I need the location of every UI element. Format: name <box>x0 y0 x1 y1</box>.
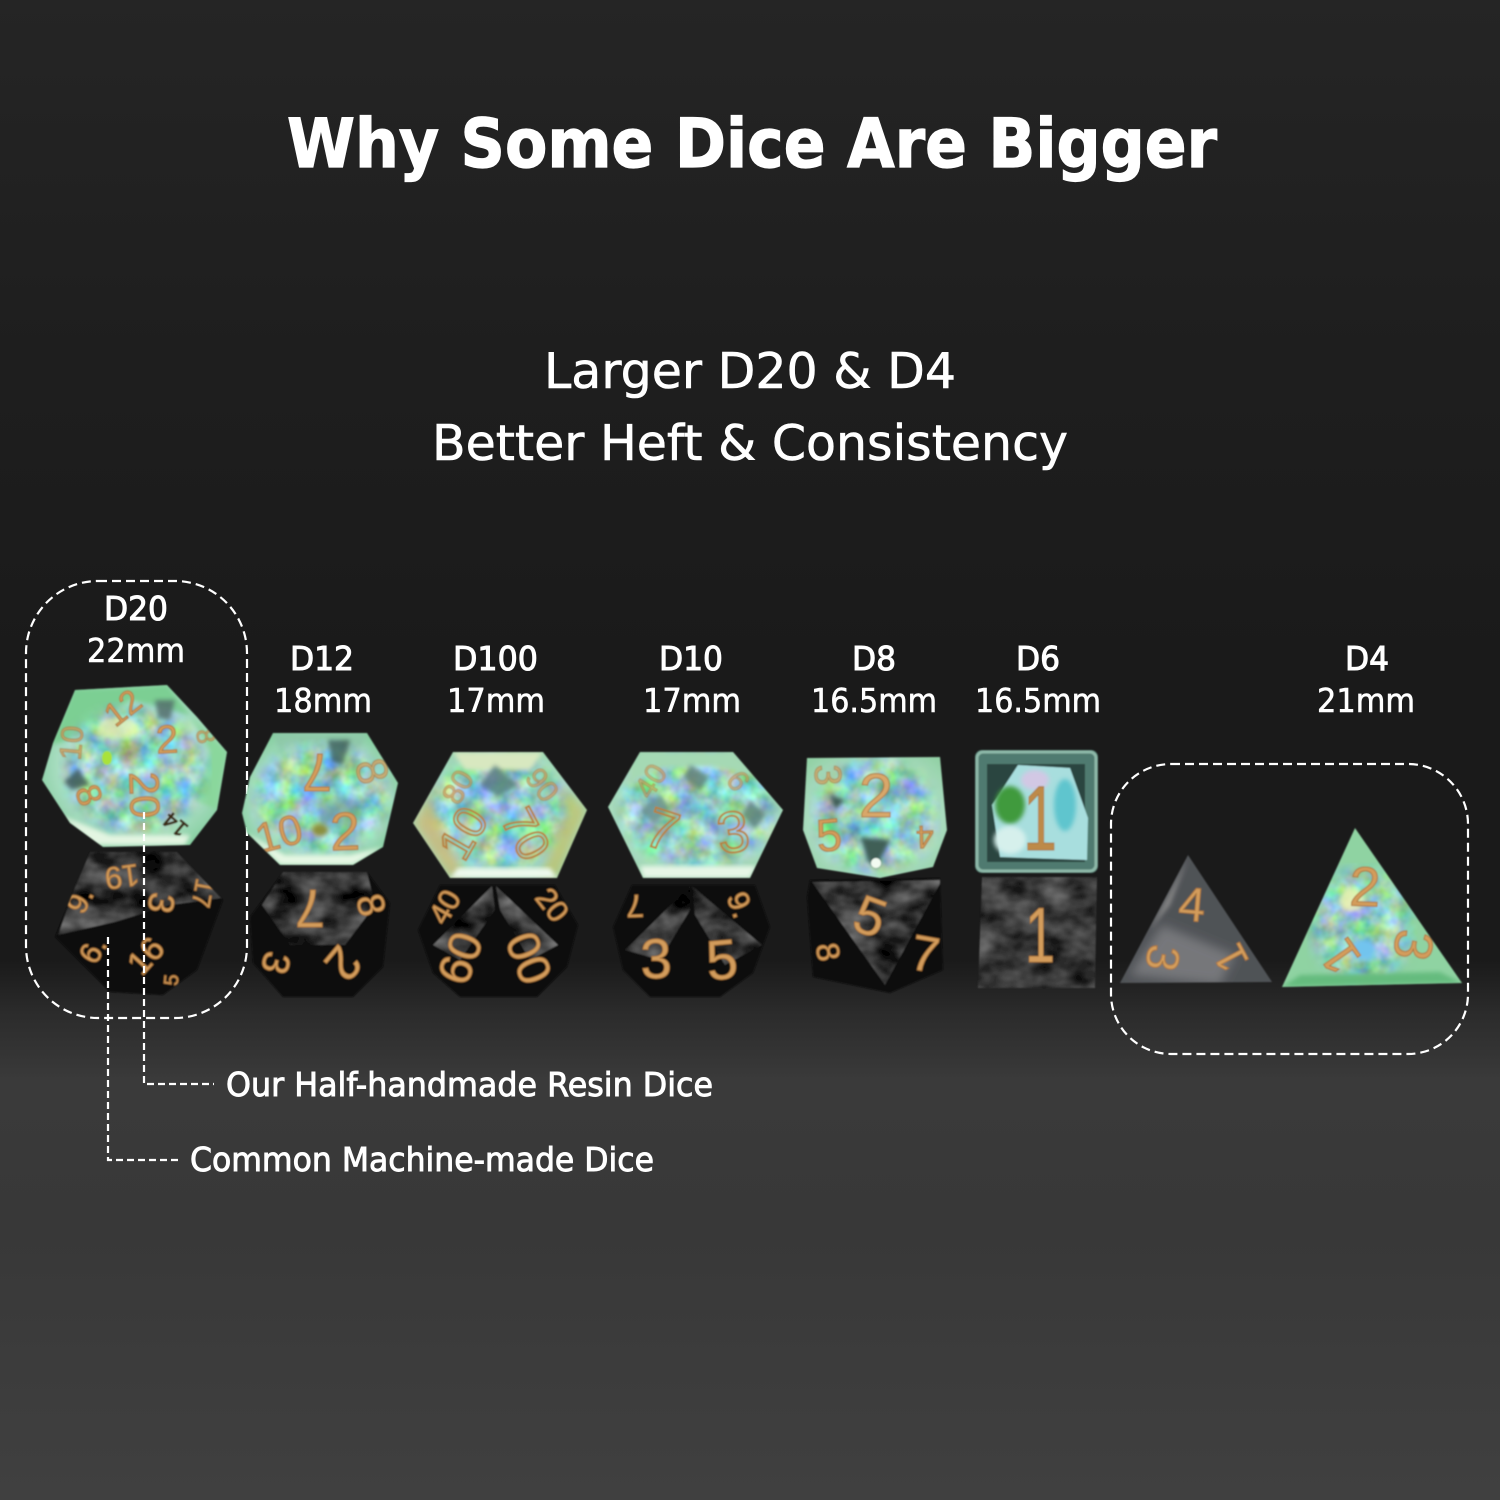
subtitle: Larger D20 & D4 <box>544 343 956 400</box>
die: resin D8: 5 <box>814 808 844 862</box>
subtitle <box>432 343 1068 472</box>
label: D10 17mm <box>643 639 741 720</box>
die: resin D10: 3 <box>713 798 754 867</box>
die: resin D4 <box>1280 825 1465 990</box>
die: black D20: 9. <box>60 881 101 919</box>
title: Why Some Dice Are Bigger <box>287 105 1217 184</box>
die: black D20 <box>55 852 223 996</box>
die: resin D8: 4 <box>915 819 935 855</box>
die: resin D20: 12 <box>97 682 149 733</box>
die: resin D20 <box>40 680 230 850</box>
die: resin D4: 2 <box>1348 854 1382 919</box>
label: D4 21mm <box>1317 639 1415 720</box>
die: black D12 <box>245 870 395 1000</box>
panel: D12 <box>240 639 400 1000</box>
die: resin D10: 40 <box>629 758 674 804</box>
die: black D100: 20 <box>528 882 575 929</box>
die: resin D6: 1 <box>1023 768 1057 870</box>
die: gray D4 <box>1120 855 1272 984</box>
die: resin D100: 90 <box>518 762 565 809</box>
label: D12 18mm <box>274 639 372 720</box>
die: resin D12: 7 <box>302 742 332 802</box>
label: D100 17mm: 17mm <box>447 681 545 720</box>
die: black D20: 5 <box>161 974 183 987</box>
panel: D100 <box>410 639 590 1000</box>
die: resin D12: 10 <box>250 805 308 862</box>
die: black D8: 5 <box>846 884 894 950</box>
die: resin D100: 70 <box>491 799 561 869</box>
die: resin D8 <box>800 755 950 880</box>
panel: D6 <box>975 639 1101 990</box>
label: D4 21mm: 21mm <box>1317 681 1415 720</box>
die: resin D12: 8 <box>345 753 398 789</box>
die: resin D10 <box>605 750 785 880</box>
label: D20 22mm: D20 <box>104 589 168 628</box>
die: black D20: 16 <box>120 930 172 982</box>
label: D20 22mm <box>87 589 185 670</box>
die: black D20: 17 <box>186 876 220 910</box>
label: D10 17mm: 17mm <box>643 681 741 720</box>
die: resin D10: 7 <box>638 795 687 864</box>
highlight box: D20 <box>26 581 247 1018</box>
callout: Our Half-handmade Resin Dice <box>144 812 713 1104</box>
die: black D6: 1 <box>1025 891 1055 979</box>
label: D12 18mm: D12 <box>290 639 354 678</box>
die: resin D20: 20 <box>120 771 169 819</box>
highlight box: D4 <box>1111 764 1468 1054</box>
label: D100 17mm <box>447 639 545 720</box>
die: gray D4: 4 <box>1176 878 1208 933</box>
die: black D12: 7 <box>295 878 325 938</box>
label: D6 16.5mm: D6 <box>1016 639 1060 678</box>
die: black D10: 3 <box>639 926 673 991</box>
label: D20 22mm: 22mm <box>87 631 185 670</box>
die: resin D8: 2 <box>859 762 893 831</box>
die: black D8: 8 <box>809 940 847 964</box>
die: resin D4: 1 <box>1309 928 1373 985</box>
label: D6 16.5mm: 16.5mm <box>975 681 1101 720</box>
die: black D12: 2 <box>314 935 371 990</box>
die: gray D4: 3 <box>1135 941 1191 975</box>
die: gray D4: 1 <box>1204 935 1259 980</box>
callout: Common Machine-made Dice <box>108 937 654 1179</box>
die: resin D8: 3 <box>806 764 848 786</box>
die: black D100: 00 <box>495 925 563 991</box>
die: black D10 <box>610 883 770 1000</box>
die: resin D12 <box>240 730 400 868</box>
callout: Common Machine-made Dice: Common Machine-made Dice <box>190 1140 654 1179</box>
panel: D10 <box>605 639 785 1000</box>
die: black D100: 40 <box>423 885 468 930</box>
die: resin D6 <box>975 750 1100 875</box>
die: black D12: 8 <box>347 890 393 921</box>
panel: D8 <box>800 639 950 996</box>
label: D8 16.5mm: 16.5mm <box>811 681 937 720</box>
die: resin D20: 14 <box>158 807 193 842</box>
label: D10 17mm: D10 <box>659 639 723 678</box>
die: black D8: 7 <box>906 924 944 984</box>
die: black D10: 5 <box>704 927 740 992</box>
die: resin D100: 80 <box>436 765 481 810</box>
die: black D20: 6. <box>73 931 114 969</box>
die: black D100: 60 <box>427 925 493 991</box>
die: black D100 <box>415 882 580 1000</box>
die: resin D12: 2 <box>329 801 361 863</box>
die: black D12: 3 <box>252 947 298 978</box>
die: black D10: 9. <box>720 888 759 923</box>
die: resin D20: 8 <box>190 726 222 746</box>
die: black D20: 19 <box>103 857 142 896</box>
panel: D4 <box>1111 639 1468 1054</box>
die: resin D100: 10 <box>428 798 498 868</box>
die: resin D20: 8 <box>67 779 110 811</box>
label: D8 16.5mm <box>811 639 937 720</box>
die: black D20: 3 <box>140 890 183 917</box>
label: D8 16.5mm: D8 <box>852 639 896 678</box>
die: black D6 <box>975 875 1100 990</box>
panel: D20 <box>26 581 247 1018</box>
subtitle: Better Heft & Consistency <box>432 415 1068 472</box>
die: resin D20: 10 <box>53 724 90 762</box>
label: D100 17mm: D100 <box>453 639 538 678</box>
callout: Our Half-handmade Resin Dice: Our Half-handmade Resin Dice <box>226 1065 713 1104</box>
die: resin D20: 2 <box>155 717 179 763</box>
die: black D8 <box>805 876 947 996</box>
die: black D10: 7 <box>625 888 645 924</box>
die: resin D10: 6 <box>719 765 756 798</box>
die: resin D100 <box>410 750 590 880</box>
label: D4 21mm: D4 <box>1345 639 1389 678</box>
label: D12 18mm: 18mm <box>274 681 372 720</box>
label: D6 16.5mm <box>975 639 1101 720</box>
die: resin D4: 3 <box>1381 925 1445 965</box>
